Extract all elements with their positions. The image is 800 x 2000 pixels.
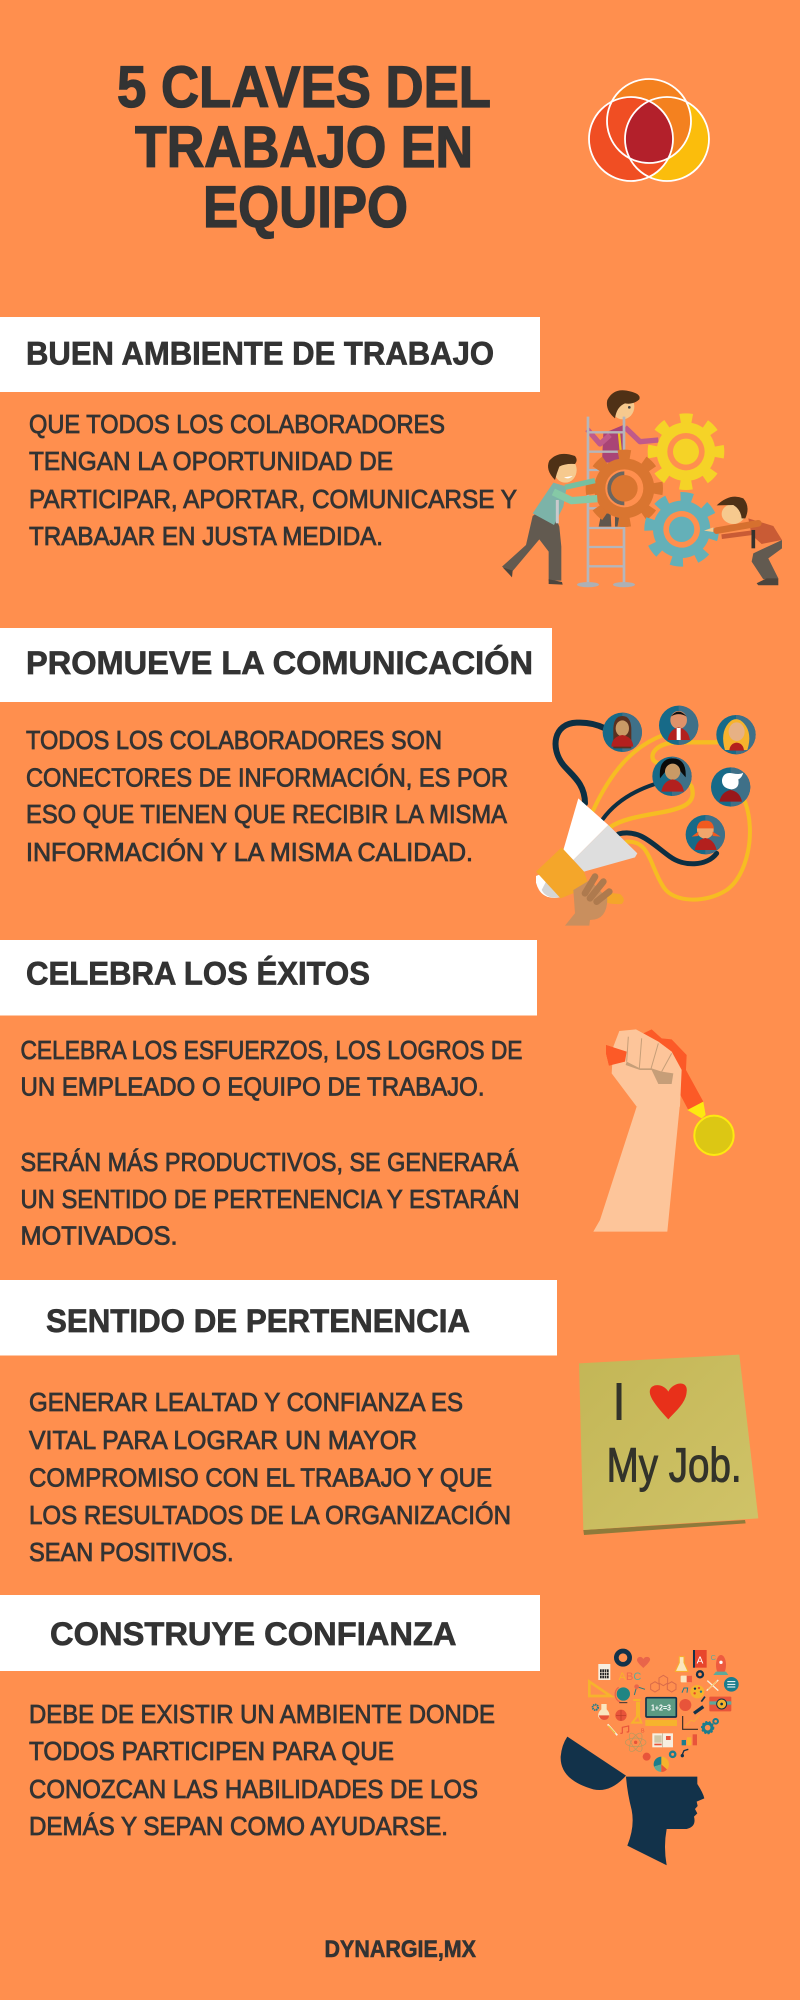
connecting lines — [556, 723, 750, 900]
panel: promueve la comunicacion — [0, 628, 756, 926]
body text: UN SENTIDO DE PERTENENCIA Y ESTARÁN — [20, 1185, 520, 1214]
megaphone body — [536, 798, 637, 904]
body text: INFORMACIÓN Y LA MISMA CALIDAD. — [26, 838, 473, 867]
title: 5 CLAVES DEL — [117, 55, 491, 120]
body text: TODOS PARTICIPEN PARA QUE — [29, 1738, 394, 1766]
body text: COMPROMISO CON EL TRABAJO Y QUE — [29, 1464, 492, 1492]
section heading bar — [0, 1595, 540, 1671]
body text: TENGAN LA OPORTUNIDAD DE — [29, 448, 393, 476]
body text: GENERAR LEALTAD Y CONFIANZA ES — [29, 1389, 463, 1417]
panel: construye confianza — [0, 1595, 739, 1865]
body text: TODOS LOS COLABORADORES SON — [26, 727, 442, 755]
section heading bar: CONSTRUYE CONFIANZA — [50, 1616, 456, 1652]
body text: ESO QUE TIENEN QUE RECIBIR LA MISMA — [26, 801, 507, 829]
body text: CELEBRA LOS ESFUERZOS, LOS LOGROS DE — [20, 1037, 522, 1065]
section heading bar: PROMUEVE LA COMUNICACIÓN — [26, 644, 533, 681]
right person — [704, 497, 782, 585]
body text: CONOZCAN LAS HABILIDADES DE LOS — [29, 1776, 478, 1804]
panel: sentido de pertenencia — [0, 1280, 758, 1567]
idea icons: C — [711, 1653, 717, 1662]
body text — [29, 411, 517, 551]
section heading bar — [0, 628, 552, 702]
title — [117, 55, 491, 240]
body text: DEMÁS Y SEPAN COMO AYUDARSE. — [29, 1812, 448, 1841]
icon: megaphone connected to people — [536, 706, 756, 926]
body text: VITAL PARA LOGRAR UN MAYOR — [29, 1427, 417, 1455]
icon: people turning gears — [502, 390, 782, 587]
section heading bar: CELEBRA LOS ÉXITOS — [26, 954, 370, 992]
icon: open head with ideas — [561, 1650, 739, 1865]
body text: SEAN POSITIVOS. — [29, 1539, 234, 1567]
body text: TRABAJAR EN JUSTA MEDIDA. — [29, 523, 383, 551]
idea icons: ABC — [619, 1671, 641, 1683]
body text: SERÁN MÁS PRODUCTIVOS, SE GENERARÁ — [20, 1148, 518, 1177]
panel: buen ambiente de trabajo — [0, 317, 782, 587]
section heading bar: SENTIDO DE PERTENENCIA — [46, 1303, 470, 1339]
title: EQUIPO — [203, 175, 408, 240]
body text: CONECTORES DE INFORMACIÓN, ES POR — [26, 764, 508, 792]
idea icons: B — [641, 1729, 645, 1735]
top person — [587, 390, 658, 527]
body text: QUE TODOS LOS COLABORADORES — [29, 411, 445, 439]
body text: DEBE DE EXISTIR UN AMBIENTE DONDE — [29, 1701, 495, 1729]
panel: celebra los exitos — [0, 940, 734, 1250]
body text: PARTICIPAR, APORTAR, COMUNICARSE Y — [29, 486, 517, 514]
idea icons: 1+2=3 — [651, 1702, 671, 1712]
body text: LOS RESULTADOS DE LA ORGANIZACIÓN — [29, 1501, 511, 1530]
idea icons: A — [697, 1655, 704, 1666]
body text — [26, 727, 508, 867]
section heading bar — [0, 1280, 557, 1356]
body text: UN EMPLEADO O EQUIPO DE TRABAJO. — [20, 1074, 484, 1102]
icon: sticky note i love my job — [579, 1355, 758, 1535]
ladder — [577, 417, 635, 587]
body text: MOTIVADOS. — [20, 1222, 178, 1250]
icon: overlapping circles logo — [589, 79, 709, 181]
footer credit: DYNARGIE,MX — [324, 1936, 477, 1963]
icon: sticky note i love my job: I — [612, 1373, 626, 1432]
body text — [20, 1037, 522, 1250]
avatars — [603, 706, 756, 854]
idea icons — [589, 1650, 739, 1772]
body text — [29, 1701, 495, 1841]
section heading bar — [0, 940, 537, 1016]
orange gear — [590, 454, 658, 522]
title: TRABAJO EN — [135, 115, 473, 180]
icon: raised fist with medal — [593, 1029, 734, 1232]
blue gear — [645, 492, 719, 566]
body text — [29, 1389, 511, 1567]
icon: sticky note i love my job: My Job. — [607, 1439, 742, 1493]
head silhouette — [561, 1737, 704, 1865]
yellow gear — [653, 418, 719, 485]
section heading bar: BUEN AMBIENTE DE TRABAJO — [26, 336, 494, 372]
left person — [502, 454, 597, 585]
section heading bar — [0, 317, 540, 392]
hand — [565, 877, 609, 926]
